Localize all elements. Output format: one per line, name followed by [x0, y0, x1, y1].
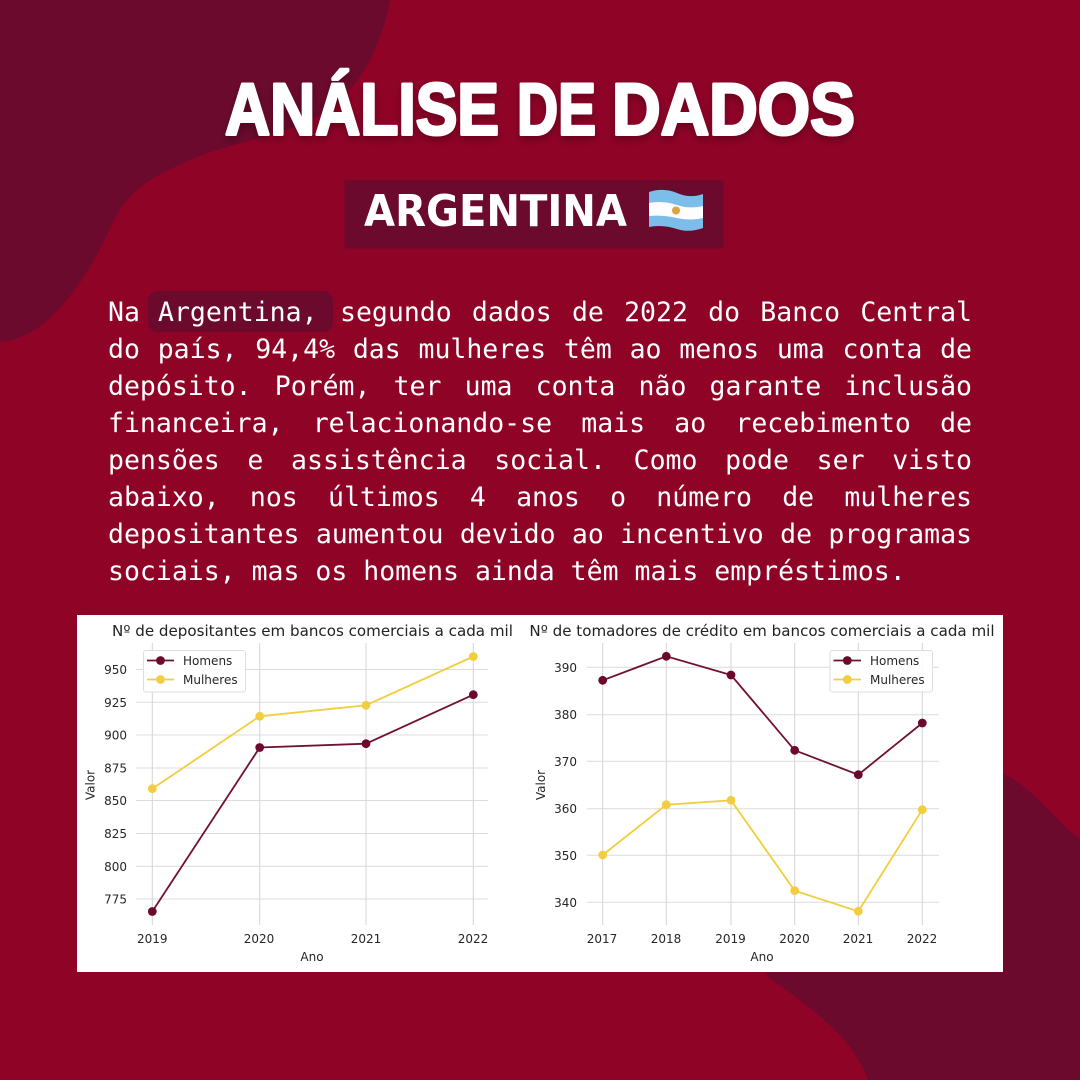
chart title: depositantes: Nº de depositantes em bancos comerciais a cada mil	[112, 622, 513, 640]
x axis labels: 2022	[458, 932, 488, 946]
title: DADOS	[612, 70, 855, 150]
line: homens	[598, 652, 927, 779]
y axis title: Valor	[84, 770, 98, 800]
paragraph: financeira, relacionando-se mais ao recebimento de	[108, 408, 972, 439]
paragraph: sociais, mas os homens ainda têm mais empréstimos.	[108, 556, 906, 587]
chart: tomadores	[529, 622, 995, 964]
x axis labels	[587, 932, 937, 964]
title: DE	[517, 70, 596, 150]
y axis labels: 360	[554, 802, 577, 816]
legend: Homens	[870, 654, 919, 668]
legend: Homens	[183, 654, 232, 668]
subtitle text: ARGENTINA	[364, 186, 627, 237]
y axis labels: 875	[104, 762, 127, 776]
paragraph: depositantes aumentou devido ao incentivo de programas	[108, 519, 972, 550]
x axis labels: 2019	[715, 932, 746, 946]
y axis labels: 950	[104, 663, 127, 677]
legend: Mulheres	[870, 673, 925, 687]
x axis labels: 2022	[907, 932, 937, 946]
y axis labels	[104, 663, 127, 906]
x axis labels: Ano	[300, 950, 324, 964]
paragraph	[108, 291, 972, 587]
x axis labels: 2021	[843, 932, 873, 946]
x axis labels: 2020	[244, 932, 274, 946]
title	[224, 68, 856, 150]
y axis labels: 340	[554, 896, 577, 910]
icon: Argentine flag	[649, 190, 703, 231]
chart title: tomadores: Nº de tomadores de crédito em bancos comerciais a cada mil	[529, 622, 995, 640]
title: ANÁLISE	[225, 70, 499, 150]
y axis labels	[554, 661, 577, 910]
legend	[144, 650, 246, 692]
paragraph: depósito. Porém, ter uma conta não garante inclusão	[108, 371, 972, 402]
y axis labels: 900	[104, 728, 127, 742]
y axis labels: 380	[554, 708, 577, 722]
paragraph: abaixo, nos últimos 4 anos o número de mulheres	[108, 482, 972, 513]
legend	[830, 650, 932, 692]
subtitle badge: Argentina with flag	[344, 180, 724, 248]
y axis labels: 800	[104, 860, 127, 874]
line: homens	[148, 690, 478, 916]
paragraph: segundo dados de 2022 do Banco Central	[340, 297, 972, 328]
y axis labels: 850	[104, 794, 127, 808]
y axis labels: 370	[554, 755, 577, 769]
y axis labels: 390	[554, 661, 577, 675]
y axis labels: 775	[104, 892, 127, 906]
paragraph: pensões e assistência social. Como pode ser visto	[108, 445, 972, 476]
x axis labels: Ano	[750, 950, 774, 964]
panel: charts	[77, 615, 1003, 972]
paragraph: Argentina,	[158, 297, 318, 328]
line: mulheres	[598, 796, 927, 916]
line: mulheres	[148, 652, 478, 793]
y axis labels: 825	[104, 827, 127, 841]
paragraph: do país, 94,4% das mulheres têm ao menos uma conta de	[108, 334, 972, 365]
y axis labels: 350	[554, 849, 577, 863]
x axis labels: 2020	[779, 932, 810, 946]
y axis title: Valor	[534, 770, 548, 800]
x axis labels	[137, 932, 488, 964]
x axis labels: 2021	[351, 932, 381, 946]
chart: depositantes	[84, 622, 513, 964]
x axis labels: 2019	[137, 932, 168, 946]
paragraph: Na	[108, 297, 140, 328]
y axis labels: 925	[104, 696, 127, 710]
x axis labels: 2018	[651, 932, 681, 946]
highlight: Argentina	[148, 291, 333, 332]
x axis labels: 2017	[587, 932, 617, 946]
legend: Mulheres	[183, 673, 238, 687]
